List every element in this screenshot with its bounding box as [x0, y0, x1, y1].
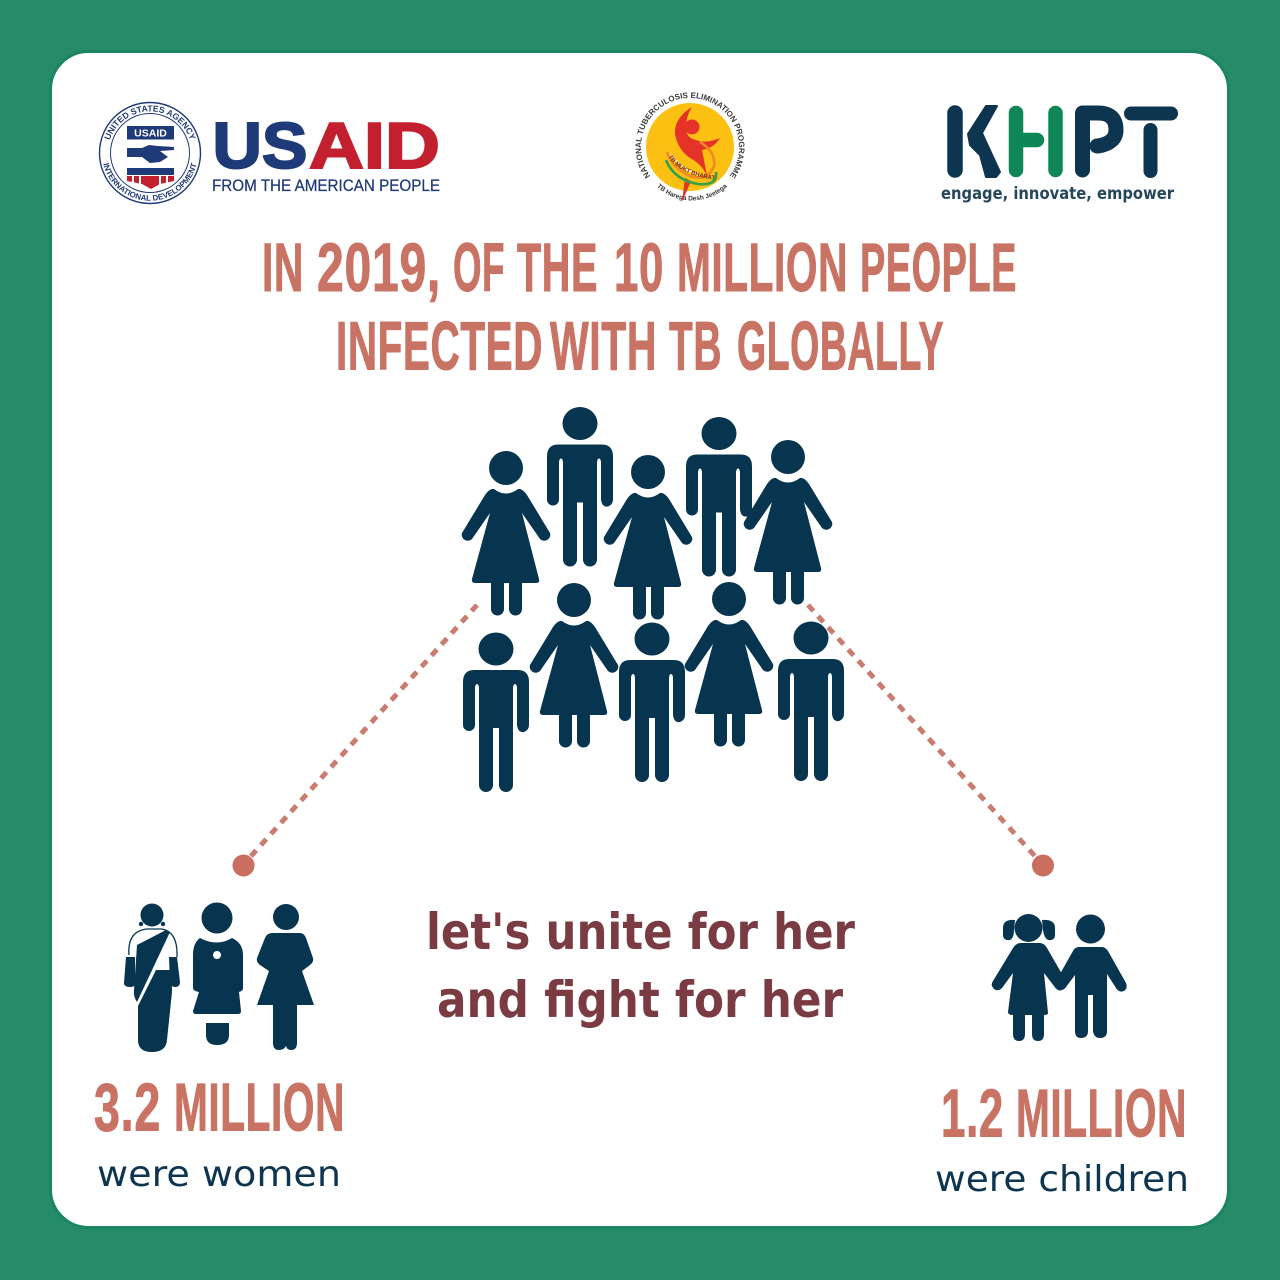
slogan	[426, 903, 855, 1029]
women number: 3.2	[94, 1070, 161, 1146]
title: INFECTED	[336, 308, 543, 384]
women label: were women	[97, 1154, 341, 1195]
logo: National TB Elimination Programme: TB MUKT BHARAT	[669, 154, 716, 180]
USAID seal	[98, 102, 202, 204]
woman in sari	[124, 904, 180, 1052]
girl	[992, 914, 1066, 1041]
children number	[941, 1076, 1187, 1152]
title	[262, 229, 1017, 384]
boy	[1054, 914, 1127, 1038]
USAID seal: USAID	[134, 128, 167, 140]
USAID seal: UNITED STATES AGENCY	[104, 106, 196, 140]
K letter	[955, 106, 1000, 177]
title: 2019,	[317, 229, 441, 306]
T letter	[1131, 114, 1171, 171]
woman in dress	[193, 902, 243, 1045]
stat: children	[935, 1076, 1189, 1200]
woman in skirt	[257, 904, 314, 1050]
P letter	[1082, 113, 1116, 170]
logo: KHPT	[941, 106, 1175, 204]
title: TB	[669, 308, 722, 384]
title: IN	[262, 229, 304, 306]
slogan: let's unite for her	[426, 903, 855, 961]
women number	[94, 1070, 345, 1146]
title: THE	[517, 229, 598, 306]
icon: three women	[124, 902, 314, 1052]
connector: dotted line to women	[232, 605, 477, 876]
USAID wordmark: US	[212, 109, 308, 182]
title: PEOPLE	[860, 229, 1017, 306]
children number: 1.2	[941, 1076, 1004, 1152]
USAID seal: INTERNATIONAL DEVELOPMENT	[103, 162, 196, 201]
icon: crowd of ten people	[462, 407, 844, 792]
title: MILLION	[677, 229, 848, 306]
H letter	[1016, 113, 1056, 170]
figure	[675, 107, 720, 180]
title: WITH	[550, 308, 657, 384]
children label: were children	[935, 1159, 1189, 1200]
stat: women	[94, 1070, 345, 1195]
USAID wordmark: FROM THE AMERICAN PEOPLE	[212, 177, 440, 195]
USAID wordmark	[212, 109, 440, 195]
KHPT tagline: engage, innovate, empower	[941, 184, 1175, 204]
title: GLOBALLY	[737, 308, 944, 384]
USAID wordmark: AID	[309, 109, 440, 182]
icon: two children	[992, 914, 1127, 1041]
logo: USAID	[98, 102, 440, 204]
slogan: and fight for her	[437, 971, 843, 1029]
logo: National TB Elimination Programme: NATIONAL TUBERCULOSIS ELIMINATION PROGRAMME	[635, 92, 745, 179]
title: 10	[614, 229, 664, 306]
connector: dotted line to children	[808, 605, 1054, 876]
title: OF	[453, 229, 505, 306]
logo: National TB Elimination Programme: TB Harega Desh Jeetega	[658, 183, 728, 201]
women number: MILLION	[174, 1070, 345, 1146]
